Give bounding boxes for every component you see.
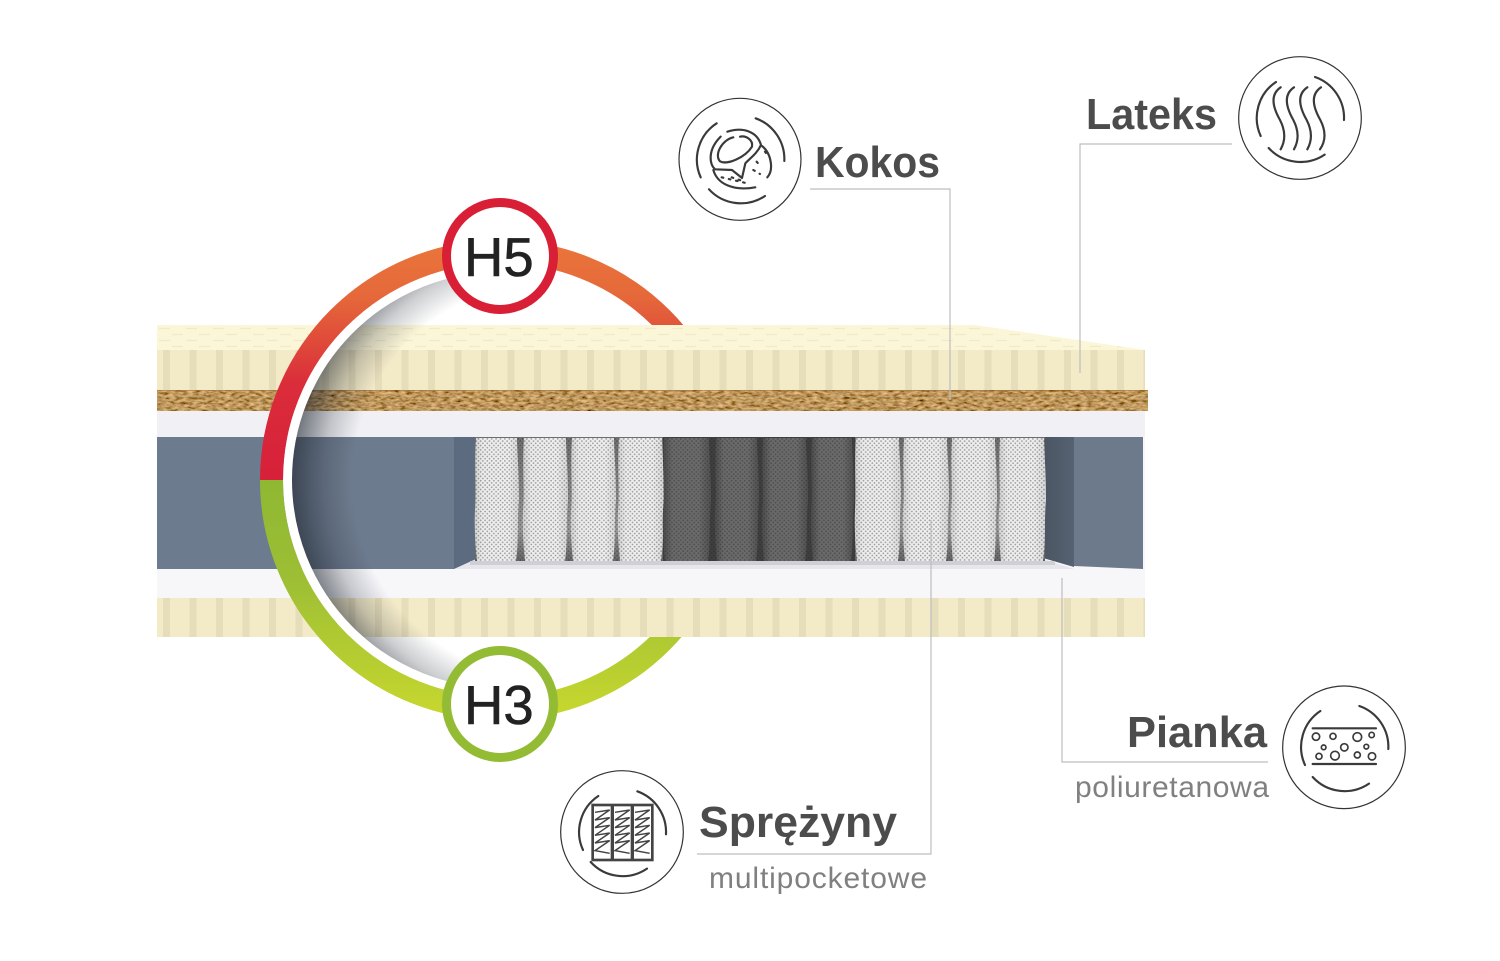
lower white foam layer xyxy=(157,569,1145,598)
latex top surface xyxy=(157,325,1145,350)
label: Kokos: Kokos xyxy=(815,138,940,187)
badge: H5: H5 xyxy=(464,227,534,288)
leader line: Kokos xyxy=(810,189,950,400)
coconut layer xyxy=(157,390,1148,411)
icon: latex waves xyxy=(1239,57,1361,179)
badge: H5 xyxy=(446,202,554,310)
pocket springs xyxy=(475,437,1046,561)
opaque mattress backing xyxy=(157,350,1145,637)
leader line: Sprezyny xyxy=(697,520,931,854)
label: Pianka: Pianka xyxy=(1127,708,1268,757)
leader line: Pianka xyxy=(1062,578,1268,762)
sublabel: poliuretanowa: poliuretanowa xyxy=(1075,771,1269,804)
label: Lateks: Lateks xyxy=(1086,90,1217,139)
icon: foam xyxy=(1283,686,1405,809)
mattress cross-section xyxy=(157,325,1148,637)
badge: H3 xyxy=(446,650,554,758)
icon: coconut xyxy=(679,98,801,220)
sublabel: multipocketowe: multipocketowe xyxy=(709,862,927,895)
icon: pocket springs xyxy=(561,771,683,893)
latex bottom layer xyxy=(157,598,1145,637)
label: Sprezyny: Sprężyny xyxy=(699,798,898,847)
firmness ring: right arc behind the mattress xyxy=(272,252,728,708)
blue foam frame left xyxy=(157,437,476,569)
leader line: Lateks xyxy=(1080,144,1232,373)
badge: H3: H3 xyxy=(464,675,534,736)
lens shadow over the mattress xyxy=(292,279,460,681)
upper white foam layer xyxy=(157,411,1145,437)
pocket spring base mesh xyxy=(454,559,1074,569)
blue foam frame right xyxy=(1043,437,1143,569)
latex layer front xyxy=(157,350,1145,390)
firmness ring: left arc over the mattress xyxy=(260,246,447,714)
